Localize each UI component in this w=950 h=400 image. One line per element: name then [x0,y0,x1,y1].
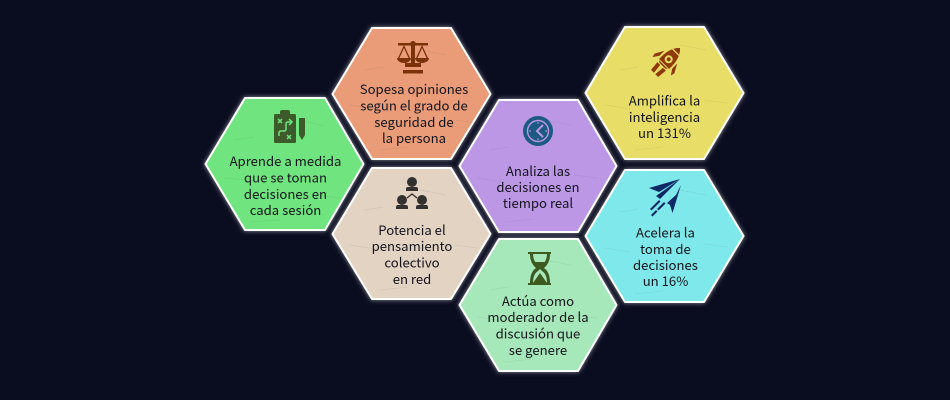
text: cyan hexagon: un 16% [643,271,688,290]
icon: hourglass [528,252,551,285]
text: orange hexagon: Sopesa opiniones [360,79,468,98]
text: light green hexagon: moderador de la [487,307,589,326]
text: purple hexagon: Analiza las [506,161,570,180]
text: light green hexagon: Actúa como [502,291,574,310]
panel: beige hexagon [332,168,490,299]
panel: green hexagon [206,98,364,230]
panel: purple hexagon [460,100,616,232]
text: orange hexagon: seguridad de [374,112,454,131]
text: cyan hexagon: decisiones [633,255,698,274]
text: purple hexagon: decisiones en [496,177,580,196]
icon: balance scales [397,41,429,74]
text: purple hexagon: tiempo real [503,193,573,212]
text: yellow hexagon: un 131% [638,123,691,142]
text: cyan hexagon: toma de [640,239,691,258]
panel: cyan hexagon [586,170,744,302]
panel: yellow hexagon [586,27,744,159]
text: green hexagon: decisiones en [244,184,327,203]
text: green hexagon: Aprende a medida [230,151,341,170]
text: green hexagon: cada sesión [250,200,321,219]
text: yellow hexagon: inteligencia [629,107,700,126]
icon: paper plane [649,179,681,216]
text: cyan hexagon: Acelera la [636,222,695,242]
text: beige hexagon: en red [393,269,431,288]
text: beige hexagon: colectivo [384,252,440,272]
text: light green hexagon: discusión que [496,324,580,342]
text: green hexagon: que se toman [244,168,327,186]
text: orange hexagon: la persona [382,128,446,147]
text: light green hexagon: se genere [509,340,567,359]
text: orange hexagon: según el grado de [360,96,468,114]
icon: clock [523,116,553,146]
icon: connected people [396,177,428,209]
icon: clipboard strategy plan [274,110,305,143]
text: beige hexagon: pensamiento [372,236,452,255]
panel: light green hexagon [460,239,616,371]
text: yellow hexagon: Amplifica la [629,90,700,110]
panel: orange hexagon [332,28,490,159]
text: beige hexagon: Potencia el [378,220,446,239]
icon: rocket [645,38,690,83]
